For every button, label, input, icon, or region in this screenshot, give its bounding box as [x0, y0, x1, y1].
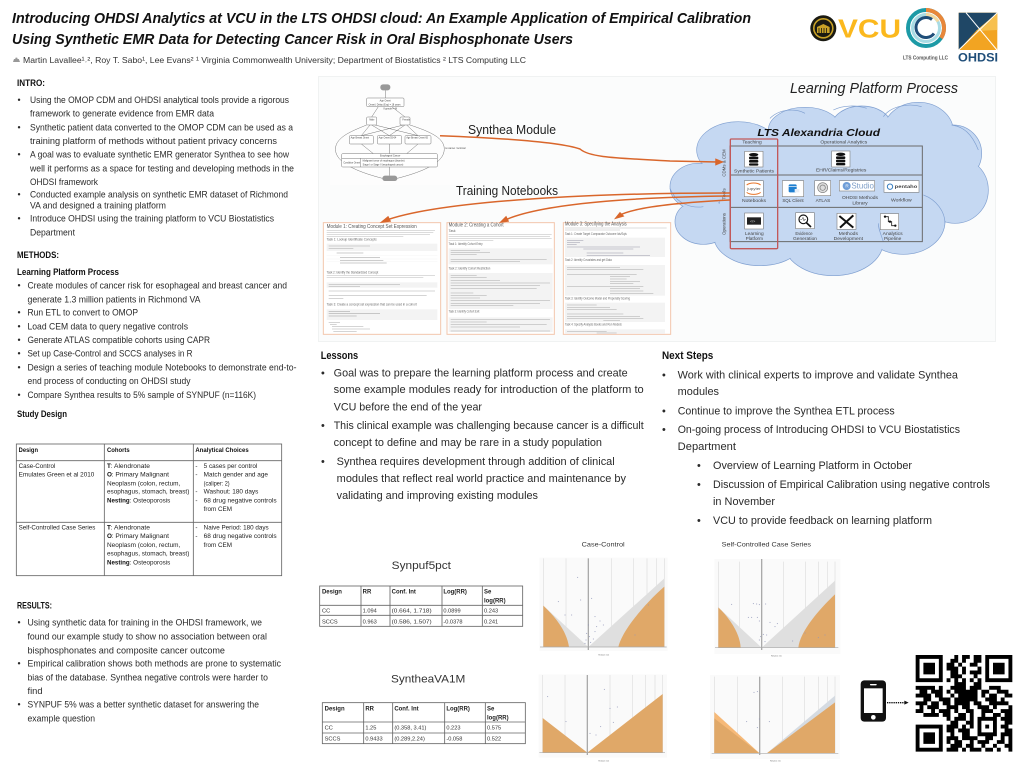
- table: Synpuf5pct results: CC: [322, 609, 330, 615]
- LTS Alexandria cloud diagram: [670, 102, 988, 276]
- table: study design: O: [107, 472, 112, 479]
- platform grid: Tools: [722, 188, 727, 200]
- icon: learning platform: Learning: [745, 231, 764, 236]
- table: SyntheaVA1M results: [322, 703, 525, 744]
- next steps bullets: VCU to provide feedback on learning platform: [713, 515, 932, 527]
- methods bullets: •: [18, 308, 21, 318]
- table: SyntheaVA1M results: (0.358, 3.41): [394, 726, 427, 732]
- table: study design: : Alendronate: [111, 525, 151, 532]
- chart: synthea module flowchart: Age Breast Onset: [351, 137, 369, 140]
- icon: methods development: Methods: [839, 231, 858, 236]
- platform grid: Operational Analytics: [820, 140, 867, 145]
- lessons bullets: modules that reflect real world practice and maintenance by: [337, 473, 627, 485]
- table: study design: [16, 444, 282, 576]
- table: study design: Match gender and age: [204, 472, 268, 479]
- table: study design: : Alendronate: [111, 463, 151, 470]
- intro bullets: [18, 95, 294, 237]
- icon: RStudio: Studio: [851, 182, 875, 191]
- chart: SCCS Synpuf5pct: Relative risk: [771, 654, 782, 657]
- table: Synpuf5pct results: (0.664, 1.718): [392, 609, 432, 615]
- icon: atlas: [815, 181, 831, 203]
- platform grid: CDMs & CEM: [722, 149, 727, 177]
- module 1 notebook: Module 1: Creating Concept Set Expression: [327, 224, 417, 230]
- module 3 notebook: Task 3: Identify Outcome Model and Propensity Scoring: [565, 296, 630, 300]
- lessons bullets: VCU before the end of the year: [334, 402, 482, 414]
- icon: pentaho workflow: Workflow: [891, 198, 913, 203]
- heading: methods: METHODS:: [17, 250, 59, 260]
- cloud title: LTS Alexandria Cloud: [757, 128, 881, 139]
- table: study design: : Osteoporosis: [130, 497, 170, 504]
- icon: RStudio: Library: [852, 200, 869, 205]
- icon: evidence generation: [793, 213, 818, 241]
- chart: synthea module flowchart: Malignant tumor of esophagus (disorder): [363, 160, 405, 163]
- icon: synthetic patients: Synthetic Patients: [734, 169, 774, 174]
- next steps bullets: Department: [678, 441, 736, 453]
- chart: case-control SyntheaVA1M: Relative risk: [598, 759, 609, 762]
- chart: synthea module flowchart: no cancer / terminal: [445, 147, 466, 150]
- chart: case-control Synpuf5pct: Relative risk: [598, 653, 609, 656]
- icon: analytics pipeline: Analytics: [883, 231, 903, 236]
- lessons bullets: Goal was to prepare the learning platform process and create: [334, 368, 628, 380]
- table: study design: 68 drug negative controls: [204, 497, 277, 504]
- table: study design: from CEM: [204, 506, 232, 513]
- table: study design: esophagus, stomach, breast): [107, 489, 189, 496]
- table: study design: -: [195, 489, 197, 496]
- table: Synpuf5pct results: Se: [484, 590, 492, 596]
- module 3 notebook: [563, 222, 671, 334]
- next steps bullets: Overview of Learning Platform in October: [713, 460, 912, 472]
- next steps bullets: modules: [678, 386, 720, 398]
- next steps bullets: •: [697, 515, 701, 527]
- next steps bullets: •: [662, 424, 666, 436]
- table: study design: Neoplasm (colon, rectum,: [107, 480, 181, 487]
- chart: synthea module flowchart: Esophageal Cancer: [380, 155, 401, 158]
- icon: methods development: [834, 213, 864, 241]
- module 3 notebook: Task 2: Identify Covariates and get Data: [565, 258, 612, 262]
- intro bullets: •: [18, 190, 21, 200]
- icon: VCU seal: [810, 15, 836, 41]
- table: Synpuf5pct results: 1.094: [363, 609, 377, 615]
- table: study design: Analytical Choices: [195, 447, 249, 454]
- table: study design: : Primary Malignant: [112, 533, 169, 540]
- heading: SyntheaVA1M: SyntheaVA1M: [391, 673, 465, 685]
- chart: SCCS Synpuf5pct: [714, 559, 840, 657]
- table: Synpuf5pct results: Log(RR): [443, 590, 467, 596]
- table: study design: 68 drug negative controls: [204, 533, 277, 540]
- table: study design: -: [195, 472, 197, 479]
- table: Synpuf5pct results: SCCS: [322, 619, 338, 625]
- chart: synthea module flowchart: Female: [402, 119, 411, 121]
- next steps bullets: Work with clinical experts to improve and validate Synthea: [678, 370, 958, 382]
- chart: case-control SyntheaVA1M: [539, 674, 667, 762]
- icon: notebooks: jupyter: [746, 187, 762, 191]
- subheading: study design: Study Design: [17, 409, 67, 419]
- intro bullets: A goal was to evaluate synthetic EMR generator Synthea to see how: [30, 150, 290, 160]
- module 1 notebook: Task 1: Lookup Identificate Concepts: [327, 237, 377, 241]
- methods bullets: Load CEM data to query negative controls: [28, 322, 189, 332]
- table: SyntheaVA1M results: 1.25: [365, 726, 376, 732]
- arrow: notebooks to module 3: [616, 200, 730, 218]
- heading: case-control: Case-Control: [582, 543, 625, 549]
- methods bullets: Create modules of cancer risk for esophageal and breast cancer and: [28, 281, 287, 291]
- next steps bullets: •: [662, 370, 666, 382]
- results bullets: found our example study to show no association between oral: [28, 632, 267, 642]
- intro bullets: •: [18, 122, 21, 132]
- LTS Computing label: LTS Computing LLC: [903, 56, 948, 62]
- label: synthea module: Synthea Module: [468, 123, 556, 137]
- results bullets: •: [18, 618, 21, 628]
- module screenshots: [323, 222, 671, 334]
- methods bullets: end process of conducting on OHDSI study: [28, 376, 191, 386]
- icon: analytics pipeline: Pipeline: [884, 236, 902, 241]
- icon: notebooks: [742, 181, 766, 203]
- table: study design: esophagus, stomach, breast): [107, 551, 189, 558]
- subheading: learning platform process: Learning Platform Process: [17, 267, 119, 277]
- icon: LTS rings: [908, 10, 944, 46]
- chart: synthea module flowchart: Age Onset 55-64: [379, 137, 397, 140]
- intro bullets: well it performs as a space for testing and developing methods in the: [29, 163, 294, 173]
- methods bullets: Run ETL to convert to OMOP: [28, 308, 138, 318]
- intro bullets: Conducted example analysis on synthetic EMR dataset of Richmond: [30, 190, 288, 200]
- next steps bullets: On-going process of Introducing OHDSI to VCU Biostatistics: [678, 424, 961, 436]
- table: Synpuf5pct results: 0.0899: [443, 609, 461, 615]
- lessons bullets: validating and improving existing modules: [337, 490, 539, 502]
- title: [12, 10, 751, 48]
- results bullets: SYNPUF 5% was a better synthetic dataset for answering the: [28, 700, 259, 710]
- methods bullets: Design a series of teaching module Notebooks to demonstrate end-to-: [28, 362, 297, 372]
- intro bullets: Synthetic patient data converted to the OMOP CDM can be used as a: [30, 122, 293, 132]
- table: study design: (caliper: 2): [204, 480, 230, 487]
- chart: synthea module flowchart: Age Breast Onset 65: [406, 137, 429, 140]
- table: study design: Nesting: [107, 559, 130, 566]
- intro bullets: VA and designed a training platform: [30, 201, 166, 211]
- table: study design: -: [195, 533, 197, 540]
- platform grid: Teaching: [742, 140, 762, 145]
- results bullets: Empirical calibration shows both methods are prone to systematic: [28, 659, 282, 669]
- icon: evidence generation: Generation: [793, 236, 818, 241]
- table: study design: T: [107, 525, 111, 532]
- icon: evidence generation: Evidence: [795, 231, 813, 236]
- heading: next steps: Next Steps: [662, 350, 713, 362]
- table: SyntheaVA1M results: CC: [325, 726, 333, 732]
- chart: case-control Synpuf5pct: [539, 558, 668, 656]
- chart: synthea module flowchart: Male: [369, 119, 375, 121]
- table: Synpuf5pct results: RR: [363, 590, 372, 596]
- platform grid: [722, 140, 922, 242]
- title: Using Synthetic EMR Data for Detecting Cancer Risk in Oral Bisphosphonate Users: [12, 31, 573, 48]
- icon: EHR registries: EHR/Claims/Registries: [816, 168, 866, 173]
- results bullets: find: [28, 686, 43, 696]
- icon: notebooks: Notebooks: [742, 198, 766, 203]
- table: Synpuf5pct results: [320, 586, 523, 626]
- table: study design: from CEM: [204, 542, 232, 549]
- intro bullets: •: [18, 150, 21, 160]
- module 2 notebook: Task: [449, 229, 456, 233]
- panel: intro: [17, 78, 294, 237]
- icon: OHDSI logo: [959, 13, 997, 50]
- module 1 notebook: [323, 223, 441, 334]
- logos: [810, 10, 998, 64]
- table: Synpuf5pct results: (0.586, 1.507): [392, 619, 432, 625]
- table: study design: Design: [19, 447, 38, 454]
- table: SyntheaVA1M results: (0.289,2.24): [394, 737, 425, 743]
- table: SyntheaVA1M results: 0.9433: [365, 737, 383, 743]
- label: training notebooks: Training Notebooks: [456, 184, 558, 198]
- table: SyntheaVA1M results: -0.058: [446, 737, 462, 743]
- next steps bullets: [662, 370, 991, 527]
- module 1 notebook: Task 3: Create a concept set expression that can be used in a cohort: [327, 302, 417, 306]
- icon: pentaho workflow: pentaho: [895, 184, 918, 189]
- methods bullets: •: [18, 335, 21, 345]
- table: SyntheaVA1M results: 0.522: [487, 737, 501, 743]
- module 2 notebook: Task 2: Identify Cohort Restriction: [449, 266, 490, 270]
- panel: methods: [17, 250, 297, 419]
- lessons bullets: [321, 368, 644, 502]
- icon: learning platform: </>: [750, 219, 755, 223]
- table: SyntheaVA1M results: Conf. Int: [394, 707, 419, 713]
- icon: smartphone: [861, 680, 886, 722]
- table: SyntheaVA1M results: Se: [487, 707, 495, 713]
- chart: synthea module flowchart: Condition Onset: [343, 162, 360, 165]
- methods bullets: [18, 281, 297, 400]
- icon: learning platform: Platform: [746, 236, 763, 241]
- intro bullets: framework to generate evidence from EMR data: [30, 109, 214, 119]
- panel: next steps: [662, 350, 991, 527]
- lessons bullets: This clinical example was challenging because cancer is a difficult: [334, 420, 644, 432]
- panel: results: [17, 601, 282, 723]
- table: study design: O: [107, 533, 112, 540]
- methods bullets: •: [18, 281, 21, 291]
- VCU wordmark: VCU: [838, 16, 901, 44]
- table: Synpuf5pct results: 0.243: [484, 609, 498, 615]
- title: Introducing OHDSI Analytics at VCU in the LTS OHDSI cloud: An Example Application of Empirical Calibration: [12, 10, 751, 27]
- table: study design: -: [195, 463, 197, 470]
- platform grid: Operations: [722, 213, 727, 235]
- methods bullets: •: [18, 349, 21, 359]
- chart: synthea module flowchart: Onset | Delay (Exp) = 18 years: [369, 103, 401, 106]
- heading: lessons: Lessons: [321, 350, 358, 362]
- icon: learning platform: [745, 213, 764, 241]
- table: Synpuf5pct results: Design: [322, 590, 342, 596]
- module 3 notebook: Task 4: Specify Analysis Books and Run Models: [565, 323, 622, 327]
- table: study design: Self-Controlled Case Series: [19, 525, 95, 532]
- icon: EHR registries: [816, 151, 866, 173]
- lessons bullets: •: [321, 420, 325, 432]
- table: study design: 5 cases per control: [204, 463, 257, 470]
- table: Synpuf5pct results: 0.241: [484, 619, 498, 625]
- table: study design: : Osteoporosis: [130, 559, 170, 566]
- icon: RStudio: [839, 181, 878, 205]
- icon: SQL client: [782, 181, 804, 203]
- intro bullets: Using the OMOP CDM and OHDSI analytical tools provide a rigorous: [30, 95, 290, 105]
- table: Synpuf5pct results: 0.963: [363, 619, 377, 625]
- module 3 notebook: Task 1: Create Target Comparator Outcome Ids/Sqls: [565, 232, 627, 236]
- table: SyntheaVA1M results: Design: [325, 707, 345, 713]
- methods bullets: •: [18, 322, 21, 332]
- chart: synthea module flowchart: [330, 80, 470, 185]
- icon: analytics pipeline: [880, 214, 903, 241]
- chart: synthea module flowchart: Age Onset: [380, 99, 391, 102]
- icon: pentaho workflow: [884, 181, 919, 203]
- table: study design: Emulates Green et al 2010: [19, 472, 95, 479]
- table: study design: -: [195, 525, 197, 532]
- lessons bullets: Synthea requires development through addition of clinical: [337, 456, 615, 468]
- cloud shape: [670, 102, 988, 276]
- results bullets: Using synthetic data for training in the OHDSI framework, we: [28, 618, 262, 628]
- icon: atlas: ATLAS: [816, 198, 830, 203]
- table: SyntheaVA1M results: 0.223: [446, 726, 460, 732]
- module 3 notebook: Module 3: Specifying the Analysis: [565, 222, 627, 228]
- module 1 notebook: Task 2: Identify the Standardized Concept: [327, 270, 378, 274]
- module 2 notebook: Task 1: Identify Cohort Entry: [449, 242, 483, 246]
- module 2 notebook: [447, 223, 554, 334]
- next steps bullets: •: [662, 406, 666, 418]
- table: study design: Nesting: [107, 497, 130, 504]
- table: study design: Neoplasm (colon, rectum,: [107, 542, 181, 549]
- methods bullets: generate 1.3 million patients in Richmond VA: [28, 294, 201, 304]
- results bullets: •: [18, 659, 21, 669]
- chart: SCCS SyntheaVA1M: [710, 675, 840, 763]
- next steps bullets: •: [697, 479, 701, 491]
- intro bullets: •: [18, 213, 21, 223]
- chart: synthea module flowchart: Stage I or Stage II (esophageal cancer): [363, 164, 404, 167]
- icon: methods development: Development: [834, 236, 864, 241]
- table: SyntheaVA1M results: 0.575: [487, 726, 501, 732]
- table: SyntheaVA1M results: RR: [365, 707, 375, 713]
- lessons bullets: concept to define and may be rare in a study population: [334, 437, 602, 449]
- lessons bullets: •: [321, 456, 325, 468]
- module 2 notebook: Module 2: Creating a Cohort: [449, 223, 504, 229]
- heading: results: RESULTS:: [17, 601, 52, 611]
- next steps bullets: in November: [713, 496, 775, 508]
- intro bullets: Department: [30, 227, 76, 237]
- results tables and plots: [320, 543, 668, 762]
- arrow: notebooks to module 1: [382, 193, 730, 222]
- next steps bullets: Discussion of Empirical Calibration using negative controls: [713, 479, 991, 491]
- heading: Synpuf5pct: Synpuf5pct: [392, 560, 452, 572]
- authors: Martin Lavallee¹˒², Roy T. Sabo¹, Lee Evans² ¹ Virginia Commonwealth University; Department of Biostatistics ² LTS Computing LLC: [23, 55, 526, 65]
- table: study design: Naive Period: 180 days: [204, 525, 269, 532]
- lessons bullets: some example modules ready for introduction of the platform to: [334, 384, 644, 396]
- intro bullets: training platform of methods without patient privacy concerns: [30, 136, 278, 146]
- table: Synpuf5pct results: -0.0378: [443, 619, 463, 625]
- table: Synpuf5pct results: Conf. Int: [392, 590, 416, 596]
- table: study design: Cohorts: [107, 447, 130, 454]
- arrow: synthea to cloud: [440, 136, 722, 164]
- heading: learning platform process: Learning Platform Process: [790, 81, 958, 97]
- table: SyntheaVA1M results: SCCS: [325, 737, 341, 743]
- results bullets: example question: [28, 713, 95, 723]
- results bullets: bias of the database. Synthea negative controls were harder to: [28, 673, 268, 683]
- table: study design: Washout: 180 days: [204, 489, 258, 496]
- methods bullets: Set up Case-Control and SCCS analyses in R: [28, 349, 192, 359]
- QR code: [916, 655, 1012, 752]
- icon: RStudio: R: [845, 184, 849, 189]
- table: Synpuf5pct results: log(RR): [484, 598, 506, 604]
- module 2 notebook: Task 3: Identify Cohort Exit: [449, 310, 479, 314]
- methods bullets: •: [18, 362, 21, 372]
- table: SyntheaVA1M results: Log(RR): [446, 707, 470, 713]
- teaching highlight: [730, 139, 778, 249]
- arrow: notebooks to module 2: [501, 196, 730, 222]
- next steps bullets: •: [697, 460, 701, 472]
- icon: SQL client: SQL Client: [782, 198, 804, 203]
- chart: synthea module flowchart: If gender = M: [383, 107, 397, 110]
- table: study design: -: [195, 497, 197, 504]
- intro bullets: Introduce OHDSI using the training platform to VCU Biostatistics: [30, 213, 275, 223]
- table: study design: : Primary Malignant: [112, 472, 169, 479]
- table: SyntheaVA1M results: log(RR): [487, 715, 509, 721]
- results bullets: [18, 618, 282, 723]
- intro bullets: •: [18, 95, 21, 105]
- panel: learning platform process: [318, 76, 996, 342]
- table: study design: Case-Control: [19, 463, 55, 470]
- methods bullets: •: [18, 390, 21, 400]
- table: study design: T: [107, 463, 111, 470]
- heading: self-controlled case series: Self-Controlled Case Series: [722, 542, 811, 548]
- intro bullets: OHDSI framework: [30, 177, 99, 187]
- OHDSI wordmark: OHDSI: [958, 52, 998, 64]
- methods bullets: Generate ATLAS compatible cohorts using CAPR: [28, 335, 210, 345]
- panel: lessons: [321, 350, 644, 502]
- results bullets: bisphosphonates and composite cancer outcome: [28, 645, 225, 655]
- lessons bullets: •: [321, 368, 325, 380]
- methods bullets: Compare Synthea results to 5% sample of SYNPUF (n=116K): [28, 390, 256, 400]
- icon: RStudio: OHDSI Methods: [842, 195, 878, 200]
- next steps bullets: Continue to improve the Synthea ETL process: [678, 406, 895, 418]
- arrow: phone to QR code: [887, 701, 909, 705]
- icon: synthetic patients: [734, 151, 774, 174]
- heading: intro: INTRO:: [17, 78, 45, 88]
- results bullets: •: [18, 700, 21, 710]
- chart: SCCS SyntheaVA1M: Relative risk: [770, 760, 781, 763]
